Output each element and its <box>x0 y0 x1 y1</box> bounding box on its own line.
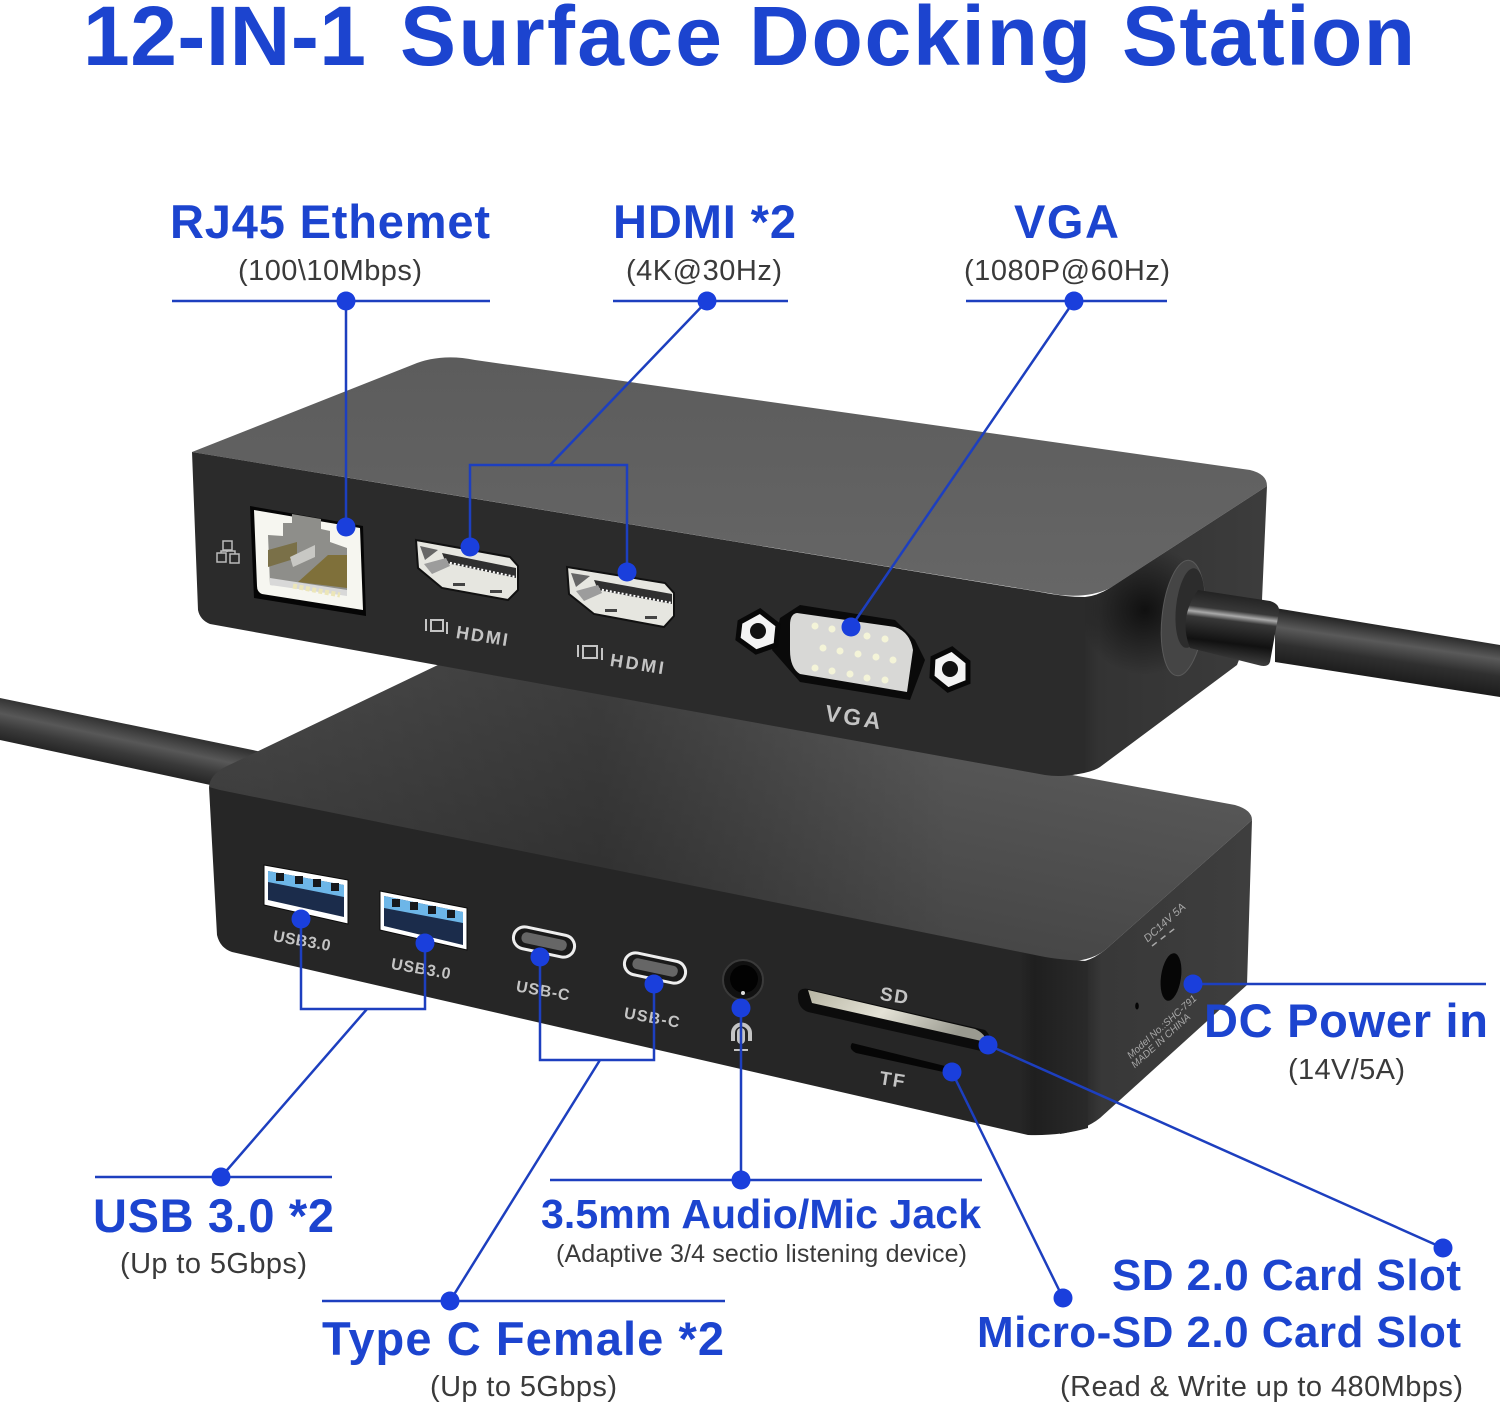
bottom dock top face shading <box>209 662 1252 962</box>
callout: HDMI <box>460 195 796 582</box>
leader line <box>172 301 490 527</box>
HDMI port labels: HDMI <box>455 622 509 650</box>
top dock front face <box>192 452 1085 776</box>
pinhole <box>1135 1002 1139 1010</box>
bottom dock top face <box>209 662 1252 962</box>
audio jack <box>723 960 763 1000</box>
SD heading: SD 2.0 Card Slot <box>1112 1251 1461 1300</box>
RJ45 port <box>250 506 366 616</box>
spec: (14V/5A) <box>1288 1054 1405 1086</box>
USB 3.0 port 2 <box>380 891 467 950</box>
top dock <box>192 357 1500 776</box>
HDMI port 2 <box>567 567 674 627</box>
top dock top face <box>192 357 1267 596</box>
spec: (Up to 5Gbps) <box>120 1248 307 1280</box>
TF slot <box>851 1043 948 1073</box>
callout: VGA <box>842 195 1170 636</box>
bottom dock <box>209 662 1252 1135</box>
cable <box>1275 608 1500 697</box>
callout: audio jack <box>541 998 982 1268</box>
heading: DC Power in <box>1204 994 1488 1047</box>
dots <box>440 948 664 1310</box>
top dock side face <box>1060 486 1267 776</box>
spec: (Adaptive 3/4 sectio listening device) <box>556 1240 967 1268</box>
SD slot <box>798 989 991 1053</box>
callout: Type C <box>322 948 725 1403</box>
spec: (Read & Write up to 480Mbps) <box>1060 1371 1463 1403</box>
spec: (Up to 5Gbps) <box>430 1371 617 1403</box>
leader lines <box>952 1045 1443 1298</box>
dot <box>1184 974 1202 994</box>
side shadow <box>1085 523 1210 767</box>
heading: 3.5mm Audio/Mic Jack <box>541 1191 981 1237</box>
leader line <box>322 957 725 1301</box>
VGA pins <box>812 622 896 684</box>
callout: USB 3.0 <box>93 910 434 1280</box>
leader line <box>470 301 788 572</box>
dots <box>942 1036 1452 1308</box>
Micro-SD heading: Micro-SD 2.0 Card Slot <box>977 1308 1461 1357</box>
HDMI port labels <box>426 619 665 678</box>
spec: (100\10Mbps) <box>238 255 422 287</box>
USB 3.0 port 1 <box>264 865 348 924</box>
icon: headset mic <box>733 1024 750 1050</box>
HDMI port 1 <box>416 540 518 600</box>
USB 3.0 port labels <box>272 928 452 983</box>
spec: (1080P@60Hz) <box>964 255 1170 287</box>
spec: (4K@30Hz) <box>626 255 782 287</box>
callout: RJ45 Ethernet <box>170 195 490 536</box>
heading: HDMI *2 <box>613 195 796 248</box>
cable collar <box>1186 590 1279 666</box>
VGA nut right <box>932 649 968 690</box>
leader line <box>95 919 425 1177</box>
heading: RJ45 Ethemet <box>170 195 490 248</box>
leader line <box>550 1008 982 1180</box>
VGA nut left <box>738 611 778 652</box>
leader line <box>1193 983 1486 985</box>
DC power jack <box>1158 952 1184 1002</box>
model print: Model No.:SHC-791 <box>1125 993 1199 1061</box>
dots <box>212 910 434 1186</box>
dots <box>336 292 356 536</box>
grommet on side <box>1156 558 1210 678</box>
VGA port label: VGA <box>823 700 883 734</box>
USB-C ports <box>511 925 688 985</box>
USB 3.0 port labels: USB3.0 <box>272 928 332 955</box>
VGA port <box>738 605 968 700</box>
dots <box>460 292 716 582</box>
bottom dock front face <box>209 787 1088 1135</box>
HDMI port labels: HDMI <box>609 650 665 678</box>
callout: DC power <box>1184 974 1488 1086</box>
SD label: SD <box>878 984 909 1009</box>
heading: VGA <box>1014 195 1119 248</box>
icon: network <box>217 541 239 563</box>
left cable <box>0 698 262 786</box>
TF label: TF <box>878 1068 906 1093</box>
callout: SD and Micro-SD <box>942 1036 1463 1403</box>
dots <box>732 998 750 1190</box>
VGA connector plate <box>790 613 913 692</box>
bottom dock side face <box>1060 820 1252 1134</box>
USB 3.0 port labels: USB3.0 <box>390 956 452 983</box>
heading: Type C Female *2 <box>322 1312 724 1365</box>
leader line <box>851 301 1167 627</box>
USB-C port labels: USB-C <box>515 978 571 1005</box>
DC rating print: DC14V 5A <box>1142 901 1188 945</box>
dots <box>842 292 1084 636</box>
heading: USB 3.0 *2 <box>93 1189 334 1242</box>
DC polarity symbol <box>1152 926 1178 946</box>
USB-C port labels: USB-C <box>623 1005 681 1032</box>
USB-C port labels <box>515 978 681 1032</box>
made in china print: MADE IN CHINA <box>1130 1012 1193 1071</box>
